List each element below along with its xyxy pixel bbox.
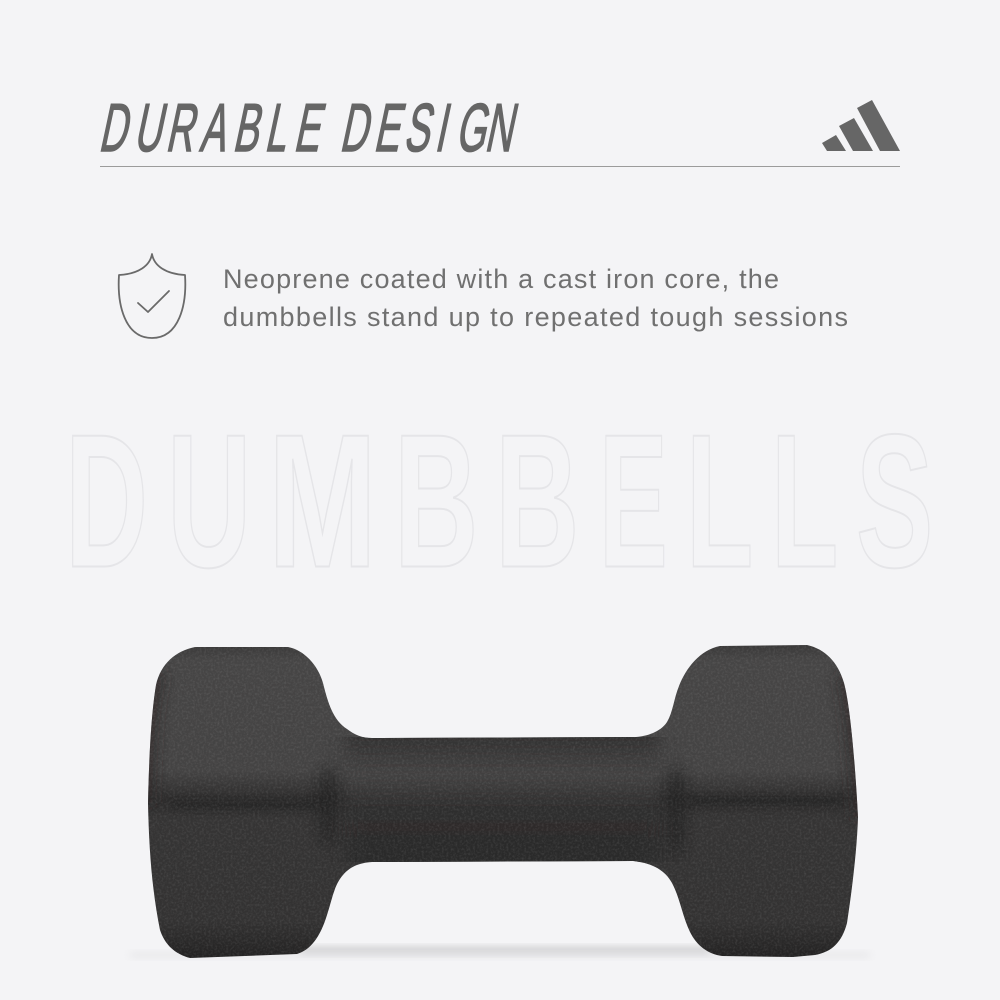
watermark word: dumbbells: E	[599, 396, 668, 608]
watermark word: dumbbells: B	[394, 395, 478, 607]
watermark word: dumbbells	[65, 394, 933, 608]
icon: adidas logo	[822, 100, 900, 151]
watermark word: dumbbells: M	[268, 394, 377, 607]
head edge shading	[148, 672, 858, 817]
watermark word: dumbbells: L	[686, 394, 753, 607]
infographic canvas	[72, 100, 930, 958]
icon: shield with check	[119, 254, 185, 338]
ridge shadows	[170, 798, 840, 808]
watermark word: dumbbells: U	[167, 395, 251, 607]
illustration: dumbbell	[140, 640, 865, 965]
dumbbell floor shadow	[130, 948, 870, 957]
dumbbell body shading	[140, 640, 865, 965]
dumbbell handle	[345, 737, 660, 862]
surface texture	[140, 640, 865, 965]
watermark word: dumbbells: L	[771, 394, 838, 607]
watermark word: dumbbells: D	[65, 396, 148, 608]
text block: description: Neoprene coated with a cast iron core, the	[223, 264, 779, 294]
text block: description: dumbbells stand up to repeated tough sessions	[223, 302, 848, 332]
text block: description	[223, 264, 848, 332]
header rule	[100, 166, 900, 167]
watermark word: dumbbells: S	[856, 396, 933, 608]
watermark word: dumbbells: B	[495, 395, 579, 607]
neck shadows	[322, 770, 682, 850]
title: DURABLE DESIGN	[95, 89, 525, 166]
